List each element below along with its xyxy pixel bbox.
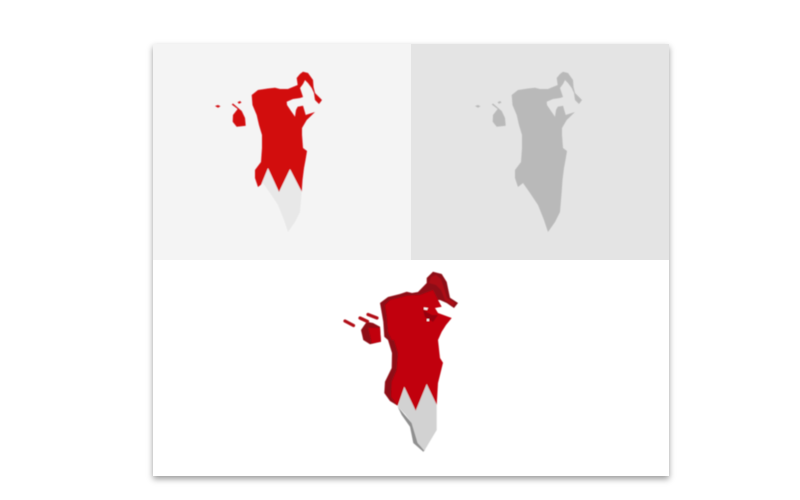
extrusion: grey side <box>398 407 425 452</box>
islets: three slashes <box>345 314 377 326</box>
map: 3D flag-patterned Bahrain <box>345 272 458 452</box>
card: map variations <box>153 44 669 476</box>
artwork: three Bahrain maps <box>153 44 669 452</box>
top face: red upper part <box>385 290 452 411</box>
panel: top right grey background <box>411 44 669 260</box>
top face: north arm <box>429 275 455 306</box>
bay: small white gaps <box>424 308 429 321</box>
top face: white lower part <box>398 384 437 451</box>
island: large western island <box>361 322 381 344</box>
extrusion: dark red side <box>380 272 458 406</box>
island: red face <box>368 328 381 343</box>
panel: top left light background <box>153 44 411 260</box>
map: flag-patterned flat Bahrain <box>215 72 322 232</box>
map: grey flat Bahrain <box>475 72 582 232</box>
bay: dark inner islets <box>423 310 438 322</box>
